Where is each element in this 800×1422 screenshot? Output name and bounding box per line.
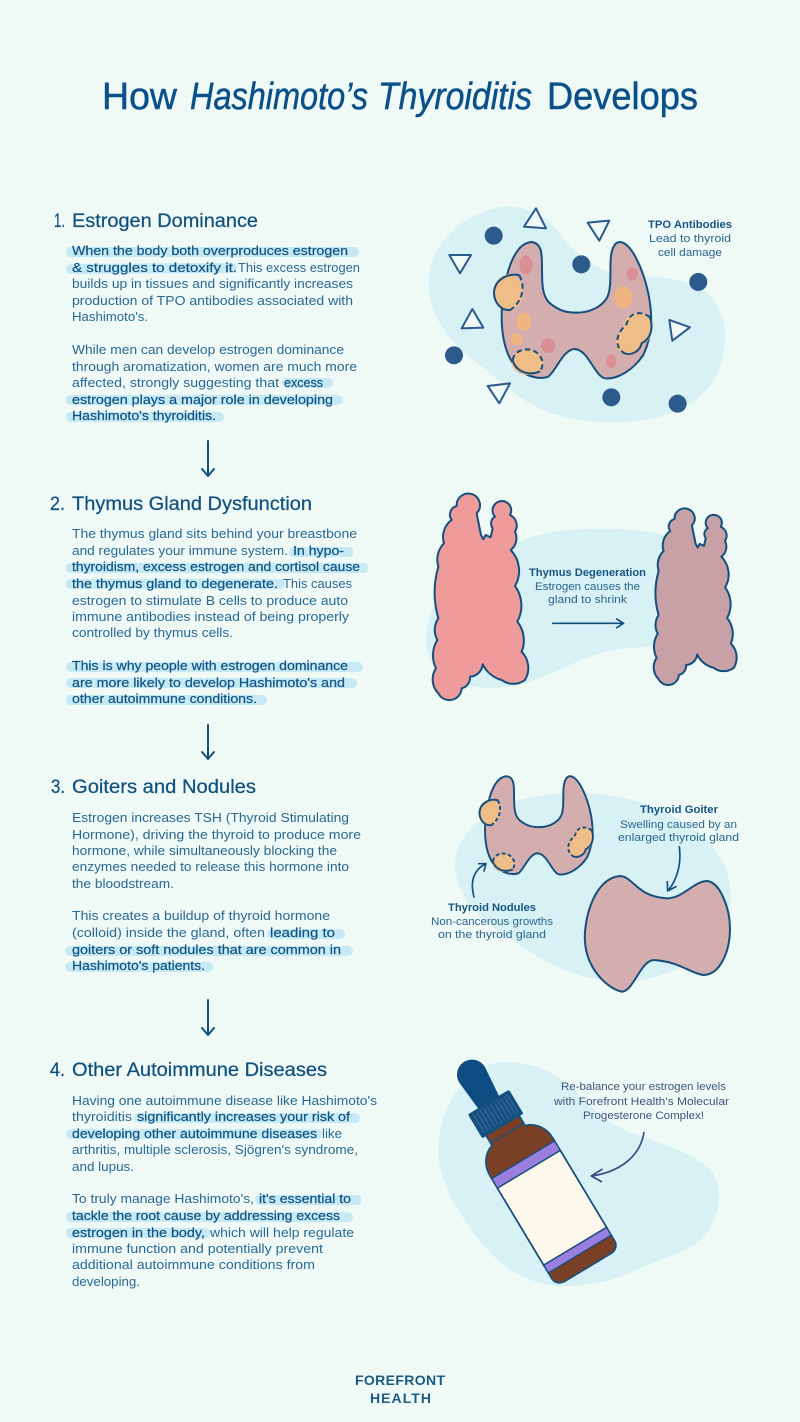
caption: thyroid goiter: enlarged thyroid gland bbox=[618, 832, 739, 844]
section 3 heading: 3. bbox=[51, 777, 65, 798]
caption: thyroid nodules: on the thyroid gland bbox=[438, 929, 546, 941]
section 1 text: This excess estrogen bbox=[238, 260, 360, 275]
section 1 text: While men can develop estrogen dominance bbox=[72, 342, 344, 357]
section 2 text: the thymus gland to degenerate. bbox=[72, 576, 278, 591]
section 4 text: arthritis, multiple sclerosis, Sjögren's syndrome, bbox=[72, 1142, 358, 1157]
caption: thyroid nodules: Thyroid Nodules bbox=[448, 902, 536, 914]
caption: thymus degeneration: gland to shrink bbox=[548, 594, 628, 606]
section 4 text: which will help regulate bbox=[209, 1225, 354, 1240]
section 1 text: Hashimoto's thyroiditis. bbox=[72, 408, 216, 423]
section 4 text: Having one autoimmune disease like Hashimoto's bbox=[72, 1093, 378, 1108]
section 3 text: Hashimoto's patients. bbox=[72, 958, 205, 973]
section 2 heading: Thymus Gland Dysfunction bbox=[72, 494, 312, 515]
section 2 text: estrogen to stimulate B cells to produce auto bbox=[72, 593, 348, 608]
section 4 text: tackle the root cause by addressing excess bbox=[72, 1208, 341, 1223]
caption: thyroid goiter bbox=[618, 804, 739, 844]
section 4 text: immune function and potentially prevent bbox=[72, 1241, 323, 1256]
section 4 text: and lupus. bbox=[72, 1159, 134, 1174]
illustration: thymus degeneration bbox=[426, 494, 737, 700]
section 2 text: controlled by thymus cells. bbox=[72, 625, 233, 640]
orange spots bbox=[511, 286, 633, 346]
nodules bbox=[493, 274, 652, 375]
section 2 text: In hypo- bbox=[293, 543, 344, 558]
caption: thyroid goiter: Thyroid Goiter bbox=[640, 804, 719, 816]
arrow: section 3 to 4 bbox=[202, 1000, 214, 1035]
caption: TPO antibodies: cell damage bbox=[658, 247, 722, 259]
caption: thyroid nodules bbox=[431, 902, 554, 941]
bottle label bbox=[497, 1150, 607, 1265]
section 4 text: like bbox=[322, 1126, 342, 1141]
section 2 text: and regulates your immune system. bbox=[72, 543, 288, 558]
section 2 text: The thymus gland sits behind your breastbone bbox=[72, 526, 357, 541]
section 2 text: This is why people with estrogen dominance bbox=[72, 658, 348, 673]
section 2 text: other autoimmune conditions. bbox=[72, 691, 257, 706]
section 2 text: are more likely to develop Hashimoto's and bbox=[72, 675, 345, 690]
caption: TPO antibodies: Lead to thyroid bbox=[649, 233, 731, 245]
section 3 text: Estrogen increases TSH (Thyroid Stimulating bbox=[72, 810, 349, 825]
section 1 text: & struggles to detoxify it. bbox=[72, 260, 237, 275]
purple bands bbox=[492, 1141, 611, 1273]
section 3 text: (colloid) inside the gland, often bbox=[72, 925, 265, 940]
section 1 text: production of TPO antibodies associated with bbox=[72, 293, 353, 308]
caption: progesterone complex: with Forefront Health's Molecular bbox=[553, 1096, 729, 1108]
section 4 heading: 4. bbox=[50, 1060, 65, 1081]
section 4 heading: Other Autoimmune Diseases bbox=[72, 1060, 327, 1081]
illustration: TPO antibodies attacking thyroid bbox=[428, 207, 725, 422]
section 2 heading: 2. bbox=[50, 494, 65, 515]
goiter bbox=[585, 876, 730, 992]
arrow: shrink bbox=[553, 619, 624, 628]
caption: thyroid nodules: Non-cancerous growths bbox=[431, 916, 554, 928]
section 1 text: through aromatization, women are much more bbox=[72, 359, 357, 374]
arrow: goiter bbox=[667, 847, 680, 891]
arrow: nodules bbox=[472, 864, 486, 897]
healthy thymus bbox=[433, 494, 528, 700]
section 2 text: This causes bbox=[283, 576, 352, 591]
section 1 text: estrogen plays a major role in developing bbox=[72, 392, 333, 407]
title: Thyroiditis bbox=[378, 76, 532, 118]
section 4 text: developing other autoimmune diseases bbox=[72, 1126, 318, 1141]
section 3 text: goiters or soft nodules that are common in bbox=[72, 942, 341, 957]
section 3 text: Hormone), driving the thyroid to produce more bbox=[72, 827, 361, 842]
section 4 text: thyroiditis bbox=[72, 1109, 133, 1124]
section 4 text: developing. bbox=[72, 1274, 140, 1289]
section 1 heading: Estrogen Dominance bbox=[72, 211, 258, 232]
section 3 text: leading to bbox=[270, 925, 335, 940]
title bbox=[102, 76, 698, 118]
section 1 text: excess bbox=[284, 375, 323, 390]
section 4 text: additional autoimmune conditions from bbox=[72, 1257, 315, 1272]
title: How bbox=[102, 76, 178, 118]
caption: thymus degeneration bbox=[529, 567, 646, 606]
section 2 text: thyroidism, excess estrogen and cortisol cause bbox=[72, 559, 360, 574]
caption: progesterone complex: Re-balance your estrogen levels bbox=[561, 1081, 727, 1093]
section 1 text: When the body both overproduces estrogen bbox=[72, 243, 348, 258]
antibody dots bbox=[445, 227, 707, 413]
dropper cap bbox=[468, 1090, 523, 1138]
section 1 text bbox=[71, 243, 360, 423]
caption: thyroid goiter: Swelling caused by an bbox=[620, 819, 737, 831]
section 1 text: builds up in tissues and significantly increases bbox=[72, 276, 354, 291]
title: Develops bbox=[547, 76, 698, 118]
title: Hashimoto’s bbox=[190, 76, 368, 118]
section 1 text: Hashimoto's. bbox=[72, 309, 148, 324]
inflamed spots bbox=[519, 256, 638, 368]
bottle bbox=[433, 1043, 619, 1286]
thyroid with nodules bbox=[479, 776, 593, 875]
section 4 text: To truly manage Hashimoto's, bbox=[72, 1191, 254, 1206]
antibody triangles bbox=[449, 208, 690, 403]
section 3 text bbox=[70, 810, 361, 973]
section 3 text: This creates a buildup of thyroid hormone bbox=[72, 908, 330, 923]
section 3 text: hormone, while simultaneously blocking the bbox=[72, 843, 337, 858]
illustration: dropper bottle bbox=[433, 1043, 719, 1286]
arrow: section 1 to 2 bbox=[202, 441, 214, 476]
section 1 text: affected, strongly suggesting that bbox=[72, 375, 279, 390]
degenerated thymus bbox=[654, 508, 737, 685]
section 4 text: estrogen in the body, bbox=[72, 1225, 205, 1240]
caption: progesterone complex bbox=[553, 1081, 729, 1122]
caption: thymus degeneration: Thymus Degeneration bbox=[529, 567, 646, 579]
logo: Forefront Health bbox=[355, 1372, 445, 1406]
section 4 text bbox=[71, 1093, 378, 1289]
logo: Forefront Health: FOREFRONT bbox=[355, 1372, 445, 1388]
arrow: section 2 to 3 bbox=[202, 725, 214, 759]
caption: progesterone complex: Progesterone Complex! bbox=[583, 1110, 704, 1122]
section 4 text: it's essential to bbox=[259, 1191, 351, 1206]
section 2 text: immune antibodies instead of being properly bbox=[72, 609, 350, 624]
dropper bulb bbox=[451, 1054, 503, 1112]
caption: TPO antibodies bbox=[648, 219, 732, 259]
section 3 text: enzymes needed to release this hormone into bbox=[72, 859, 349, 874]
arrow: to bottle bbox=[591, 1133, 644, 1182]
section 3 text: the bloodstream. bbox=[72, 876, 174, 891]
illustration: nodules and goiter bbox=[455, 776, 731, 992]
section 2 text bbox=[71, 526, 363, 706]
caption: thymus degeneration: Estrogen causes the bbox=[535, 581, 640, 593]
section 1 heading: 1. bbox=[54, 211, 65, 232]
section 4 text: significantly increases your risk of bbox=[137, 1109, 350, 1124]
bottle body bbox=[471, 1107, 619, 1286]
logo: Forefront Health: HEALTH bbox=[370, 1390, 431, 1406]
section 3 heading: Goiters and Nodules bbox=[72, 777, 256, 798]
caption: TPO antibodies: TPO Antibodies bbox=[648, 219, 732, 231]
thyroid gland bbox=[502, 242, 651, 378]
